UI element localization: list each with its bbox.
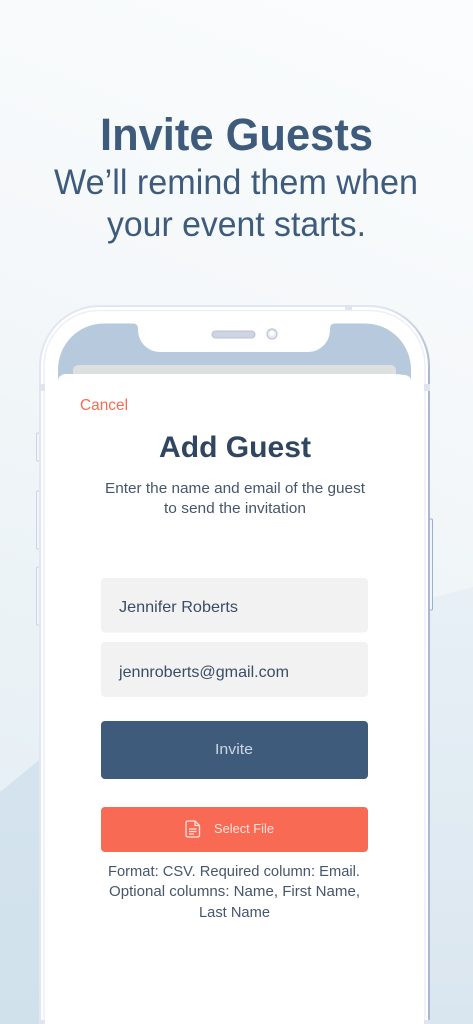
phone side buttons bbox=[36, 433, 432, 625]
phone mockup bbox=[36, 305, 432, 1024]
select file button bbox=[101, 807, 368, 852]
subtitle: your event starts. bbox=[107, 205, 366, 244]
modal card bbox=[58, 374, 411, 1024]
name field: Jennifer Roberts bbox=[119, 599, 238, 616]
phone right rim shading bbox=[369, 306, 429, 1024]
format note bbox=[108, 863, 360, 921]
background sheet bbox=[73, 365, 396, 376]
modal heading: Add Guest bbox=[159, 431, 311, 464]
cancel link: Cancel bbox=[80, 397, 128, 414]
subtitle bbox=[54, 163, 418, 244]
instructions: Enter the name and email of the guest bbox=[105, 480, 366, 497]
name field bbox=[101, 578, 368, 632]
format note: Format: CSV. Required column: Email. bbox=[108, 863, 360, 880]
phone inner rim bbox=[44, 310, 425, 1024]
camera bbox=[267, 329, 277, 339]
antenna bands bbox=[39, 305, 430, 1024]
icon: document bbox=[186, 821, 200, 837]
format note: Optional columns: Name, First Name, bbox=[109, 883, 360, 900]
speaker bbox=[212, 331, 255, 338]
instructions: to send the invitation bbox=[164, 500, 306, 517]
title: Invite Guests bbox=[100, 109, 373, 160]
invite button: Invite bbox=[215, 741, 253, 758]
email field: jennroberts@gmail.com bbox=[118, 664, 289, 681]
screen header with notch bbox=[58, 324, 411, 380]
instructions bbox=[105, 480, 366, 517]
select file button: Select File bbox=[214, 821, 274, 836]
email field bbox=[101, 642, 368, 697]
phone body bbox=[40, 306, 429, 1024]
format note: Last Name bbox=[199, 904, 270, 921]
subtitle: We’ll remind them when bbox=[54, 163, 418, 202]
invite button bbox=[101, 721, 368, 779]
